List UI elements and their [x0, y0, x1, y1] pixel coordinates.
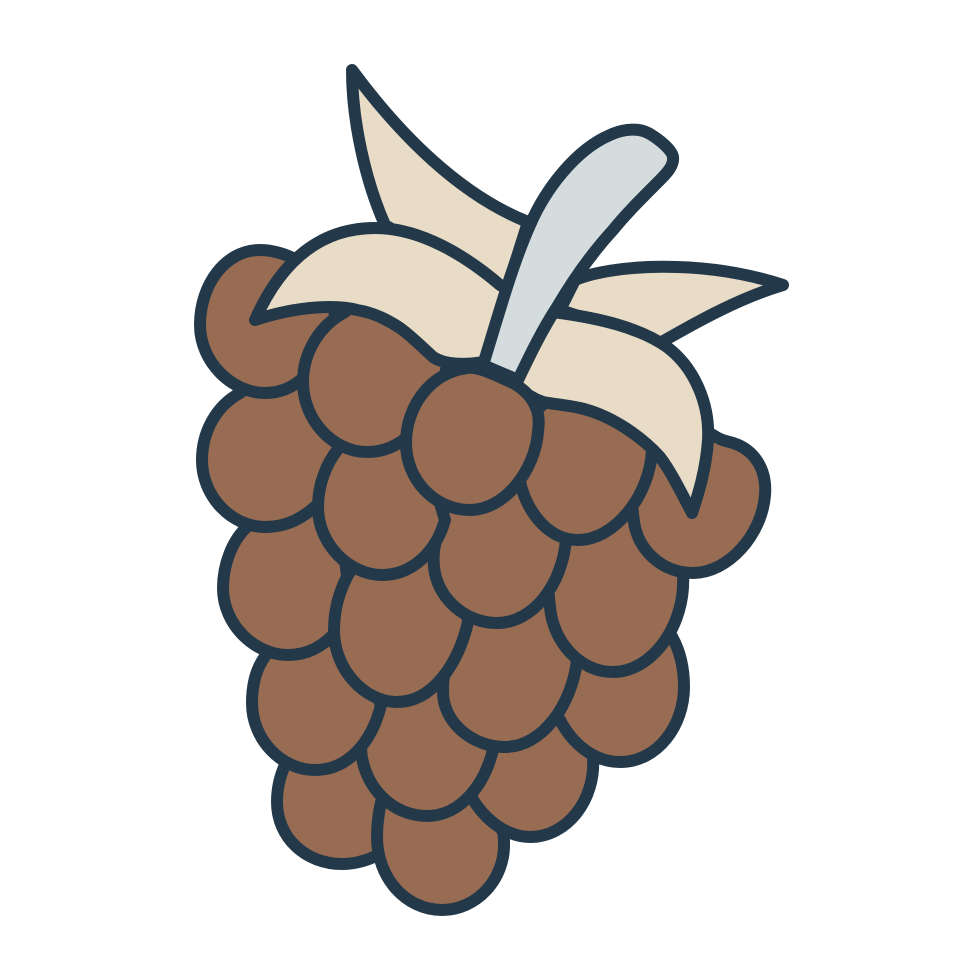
- stem: [483, 130, 673, 380]
- back leaves: [352, 70, 783, 343]
- front leaf: [255, 228, 708, 513]
- berry drupelets: [200, 250, 765, 910]
- front drupelet: [406, 368, 539, 510]
